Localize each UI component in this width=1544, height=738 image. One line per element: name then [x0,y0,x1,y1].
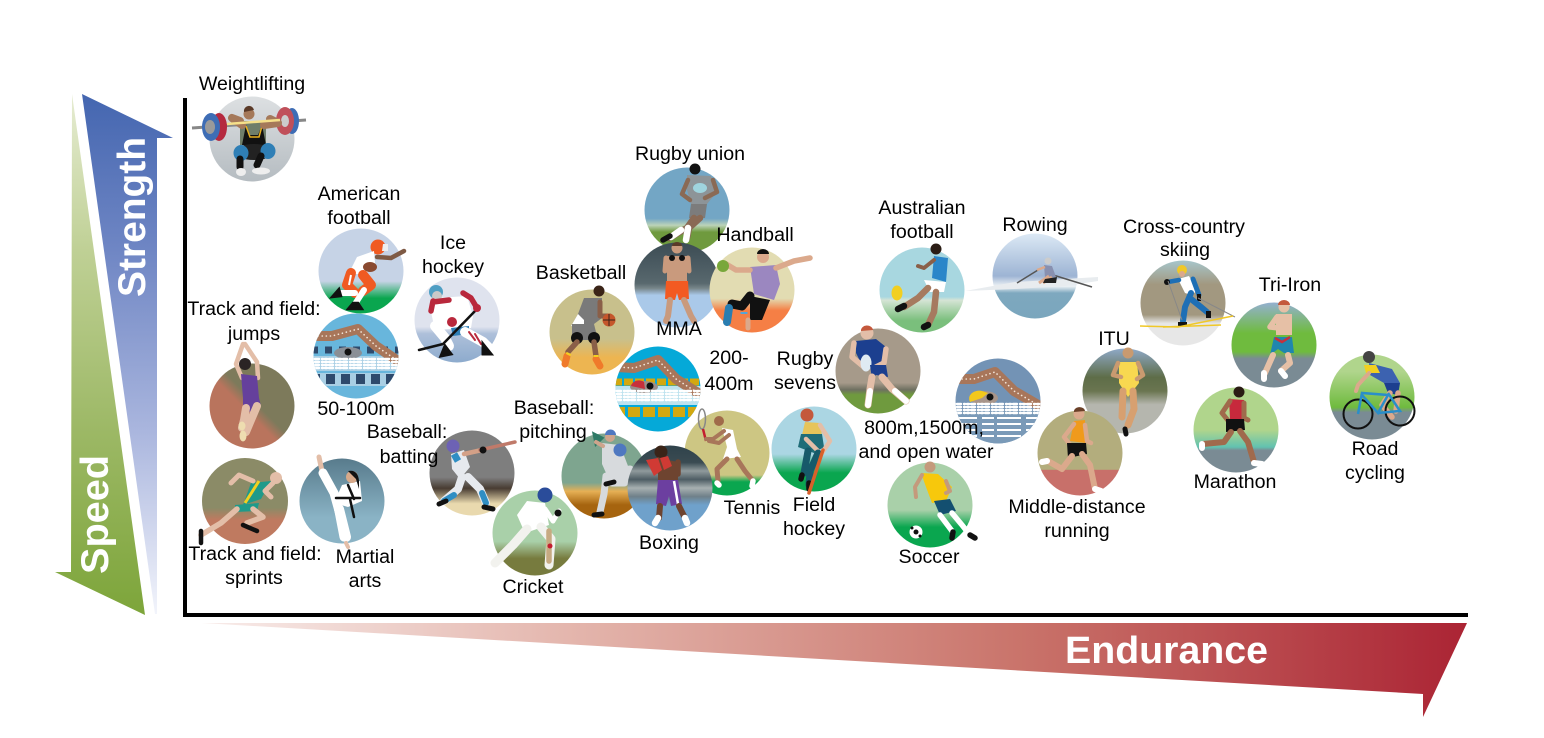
sport: 50-100m swimming [311,314,401,398]
sport: boxing [628,446,712,530]
figure: swimmer, lanes and foam [311,329,401,386]
figure: ironman triathlete [1264,300,1294,379]
figure: weightlifter [192,106,306,176]
sport: martial arts [300,457,384,547]
sport: weightlifting [192,96,306,182]
label: ITU: ITU [1098,328,1130,350]
label: Field hockey: Field [793,494,835,516]
label: Road cycling: Road [1352,438,1398,460]
label: 50-100m: 50-100m [317,398,395,420]
label: 800m, 1500m, and open water: and open water [858,441,994,463]
label: Road cycling: cycling [1345,462,1405,484]
label: Tennis: Tennis [724,497,781,519]
label: Baseball pitching: Baseball: [514,397,594,419]
label: Cross-country skiing: Cross-country [1123,216,1245,238]
figure: running back [332,240,404,309]
sport: soccer [888,462,975,548]
label: Baseball batting: batting [380,446,438,468]
axis label: Speed: Speed [74,455,117,574]
label: Ice hockey: hockey [422,256,484,278]
figure: AFL kicker [892,244,948,327]
figure: ITU triathlete [1113,348,1143,434]
label: Track and field sprints: sprints [225,567,283,589]
sport: cross-country skiing [1140,260,1235,346]
sport: baseball batting [430,430,515,516]
label: Australian football: football [890,221,954,243]
label: MMA: MMA [656,318,703,340]
sport: field hockey [772,406,856,493]
figure: tennis player [698,409,753,486]
sport: rugby union [644,164,730,252]
axis label: Strength: Strength [111,137,154,297]
label: 200-400m: 400m [704,373,754,395]
sport: 200-400m swimming [613,346,703,432]
figure: MMA fighter [665,242,694,321]
sport: ITU triathlon [1082,348,1168,434]
label: Handball: Handball [716,224,794,246]
figure: basketball player [565,286,616,366]
label: Rugby sevens: sevens [774,372,836,394]
figure: soccer player [910,462,975,538]
label: Rugby sevens: Rugby [777,348,834,370]
label: Marathon: Marathon [1194,471,1276,493]
figure: batter [439,440,515,509]
figure: batsman [495,488,562,565]
label: Baseball pitching: pitching [519,421,587,443]
figure: taekwondo kicker [319,457,362,547]
sport: rugby sevens [836,325,920,414]
sport: tennis [684,409,770,496]
figure: field hockey player [798,408,830,493]
label: Cross-country skiing: skiing [1160,239,1210,261]
sport: marathon [1194,386,1278,472]
figure: rugby player [663,164,717,240]
labels [187,73,1405,598]
figure: swimmer, lanes and foam [613,360,703,412]
sport: handball [710,248,810,332]
label: Middle-distance running: Middle-distance [1008,496,1146,518]
sport: ice hockey [414,278,500,362]
label: Australian football: Australian [878,197,966,219]
sport: middle-distance running [1038,407,1122,496]
label: Soccer: Soccer [899,546,960,568]
figure: sprinter [201,472,282,543]
label: Track and field jumps: Track and field: [187,298,321,320]
sport: track and field jumps [210,344,294,448]
sport: baseball pitching [562,430,646,518]
sport: Australian football [880,244,964,332]
sport: American football [318,228,404,314]
figure: hockey player [419,285,491,356]
arrow: endurance [202,623,1467,717]
figure: middle-distance runner [1042,407,1101,491]
sport: track and field sprints [201,458,288,544]
label: Tri-Iron: Tri-Iron [1259,274,1321,296]
label: Ice hockey: Ice [440,232,466,254]
arrow: speed [55,94,145,615]
arrow: strength [82,94,173,614]
sport: MMA [634,242,720,328]
label: Baseball batting: Baseball: [367,421,447,443]
label: Field hockey: hockey [783,518,845,540]
figure: marathon runner [1202,386,1262,464]
label: Martial arts: arts [349,570,382,592]
label: Track and field sprints: Track and field: [188,543,322,565]
axes [185,98,1468,615]
sport: basketball [550,286,634,374]
label: American football: American [318,183,400,205]
label: Rowing: Rowing [1002,214,1068,236]
label: Rugby union: Rugby union [635,143,745,165]
figure: handball player [717,249,810,328]
figure: rugby sevens player [852,325,906,405]
figure: jumper [236,344,261,442]
label: 800m, 1500m, and open water: 800m,1500m, [864,417,984,439]
sport: Tri-Iron [1232,300,1316,388]
label: Track and field jumps: jumps [227,323,280,345]
figure: boxer [646,446,687,523]
label: Boxing: Boxing [639,532,699,554]
axis label: Endurance: Endurance [1065,630,1268,672]
figure: cyclist [1344,351,1414,428]
figure: open water swimmer [953,372,1043,446]
label: 200-400m: 200- [709,347,749,369]
sport: cricket [492,488,578,576]
label: Weightlifting: Weightlifting [199,73,305,95]
sport: rowing [965,234,1098,318]
label: Martial arts: Martial [336,546,394,568]
sport: 800m, 1500m and open water swimming [953,358,1043,446]
sport: road cycling [1330,351,1414,440]
figure: skier [1140,265,1235,327]
label: Cricket: Cricket [503,576,564,598]
figure: pitcher [594,430,630,515]
label: Middle-distance running: running [1044,520,1110,542]
figure: rower and scull [965,258,1098,291]
label: American football: football [327,207,391,229]
label: Basketball: Basketball [536,262,626,284]
